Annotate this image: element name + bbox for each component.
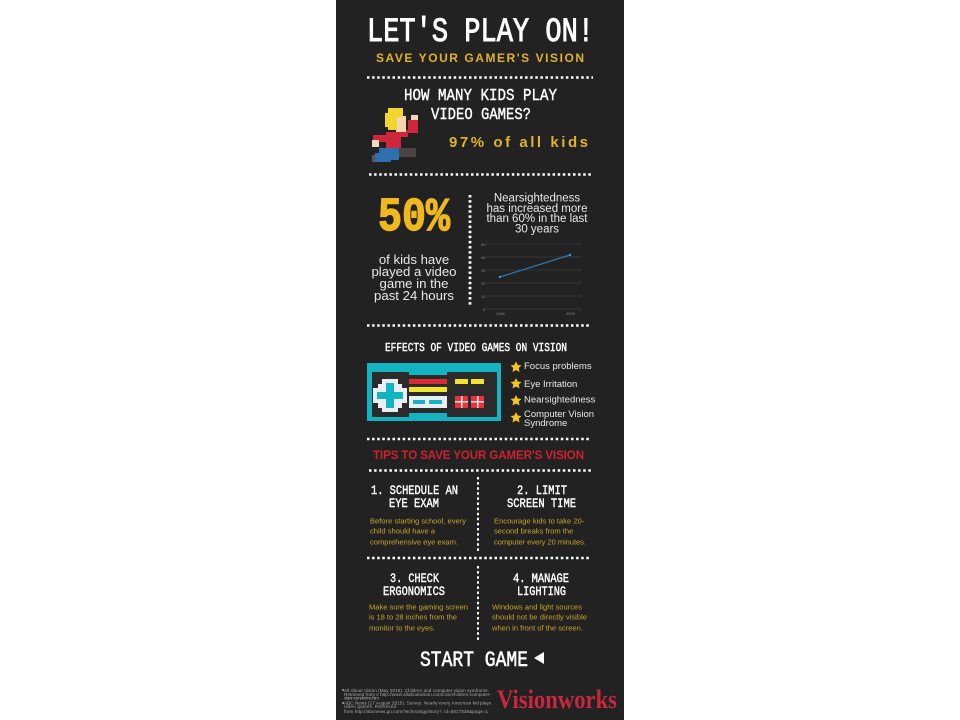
heading: effects: EFFECTS OF VIDEO GAMES ON VISION	[385, 342, 567, 355]
tip 1: EYE EXAM	[389, 496, 439, 511]
text: nearsightedness	[486, 192, 588, 236]
text: nearsightedness: 30 years	[515, 224, 559, 236]
tip 2: computer every 20 minutes.	[494, 538, 586, 546]
sources: All About Vision (May 2015). Children and computer vision syndrome.	[344, 688, 489, 693]
sources: vision-syndrome.htm	[344, 696, 379, 700]
line chart: 2016	[566, 311, 576, 316]
icon: game controller	[367, 363, 501, 421]
stat: 97 percent: 97% of all kids	[449, 134, 588, 151]
tip 3: monitor to the eyes.	[369, 624, 435, 632]
list text	[524, 361, 596, 429]
icon: star	[510, 412, 522, 422]
list text: Nearsightedness	[524, 394, 596, 406]
subtitle: SAVE YOUR GAMER'S VISION	[376, 51, 584, 65]
line chart: 0	[483, 307, 486, 312]
heading: how many kids	[404, 86, 557, 124]
sources: ABC News (17 August 2015). Survey: Nearly every American kid plays	[344, 700, 492, 706]
text: nearsightedness: than 60% in the last	[486, 213, 588, 225]
list text: Eye Irritation	[524, 379, 577, 390]
sources: from http://abcnews.go.com/Technology/story?. id=5817836&page=1	[344, 709, 488, 714]
text: nearsightedness: Nearsightedness	[494, 192, 580, 204]
tip 4: 4. MANAGE	[513, 571, 569, 586]
text: kids played: past 24 hours	[374, 288, 454, 303]
heading: tips: TIPS TO SAVE YOUR GAMER'S VISION	[373, 450, 584, 462]
logo: Visionworks: Visionworks	[497, 685, 617, 714]
tip 4: LIGHTING	[517, 584, 566, 599]
tip 2	[494, 483, 586, 546]
sources: Retrieved from s http://www.allaboutvision.com/cvs/children-computer-	[344, 692, 491, 697]
tip 1	[370, 483, 466, 546]
icon: star	[510, 395, 522, 406]
tip 3: Make sure the gaming screen	[369, 602, 468, 612]
list text: Syndrome	[524, 418, 567, 429]
text: kids played: game in the	[380, 276, 448, 291]
start game: START GAME	[420, 648, 528, 673]
tip 1: child should have a	[370, 526, 436, 536]
title: LET'S PLAY ON!	[367, 14, 594, 52]
heading: how many kids: VIDEO GAMES?	[431, 105, 531, 124]
tip 4	[491, 571, 587, 632]
tip 1: 1. SCHEDULE AN	[371, 483, 458, 498]
tip 4: should not be directly visible	[492, 612, 587, 622]
icon: star	[510, 378, 522, 388]
tip 4: when in front of the screen.	[491, 624, 583, 632]
tip 1: Before starting school, every	[370, 516, 466, 526]
line chart: 40	[481, 255, 486, 260]
line chart: 10	[481, 294, 486, 299]
tip 1: comprehensive eye exam.	[370, 538, 458, 546]
line chart: 50	[481, 242, 486, 247]
icon: running pixel kid	[372, 108, 418, 162]
text: nearsightedness: has increased more	[486, 203, 588, 215]
line chart: 20	[481, 281, 486, 286]
text: kids played	[371, 252, 457, 303]
panel: dark background	[336, 0, 624, 720]
tip 3: is 18 to 28 inches from the	[369, 612, 457, 622]
sources	[342, 688, 492, 714]
line chart: 30	[481, 268, 486, 273]
tip 3	[369, 571, 468, 632]
tip 3: 3. CHECK	[390, 571, 439, 586]
tip 2: SCREEN TIME	[507, 496, 576, 511]
text: kids played: of kids have	[379, 252, 449, 267]
line chart: 1966	[496, 311, 506, 316]
icon: star	[510, 362, 522, 372]
icon: arrow	[534, 652, 544, 664]
text: kids played: played a video	[371, 264, 457, 279]
sources: video games. Retrieved	[344, 704, 396, 709]
list: vision effects	[510, 361, 596, 429]
heading: how many kids: HOW MANY KIDS PLAY	[404, 86, 557, 105]
line chart	[481, 242, 582, 316]
tip 2: Encourage kids to take 20-	[494, 516, 585, 526]
list text: Focus problems	[524, 361, 592, 372]
list text: Computer Vision	[524, 409, 594, 420]
stat: 50 percent: 50%	[378, 192, 451, 245]
tip 2: 2. LIMIT	[517, 483, 567, 498]
tip 3: ERGONOMICS	[383, 584, 445, 599]
tip 2: second breaks from the	[494, 526, 573, 536]
tip 4: Windows and light sources	[492, 602, 582, 612]
